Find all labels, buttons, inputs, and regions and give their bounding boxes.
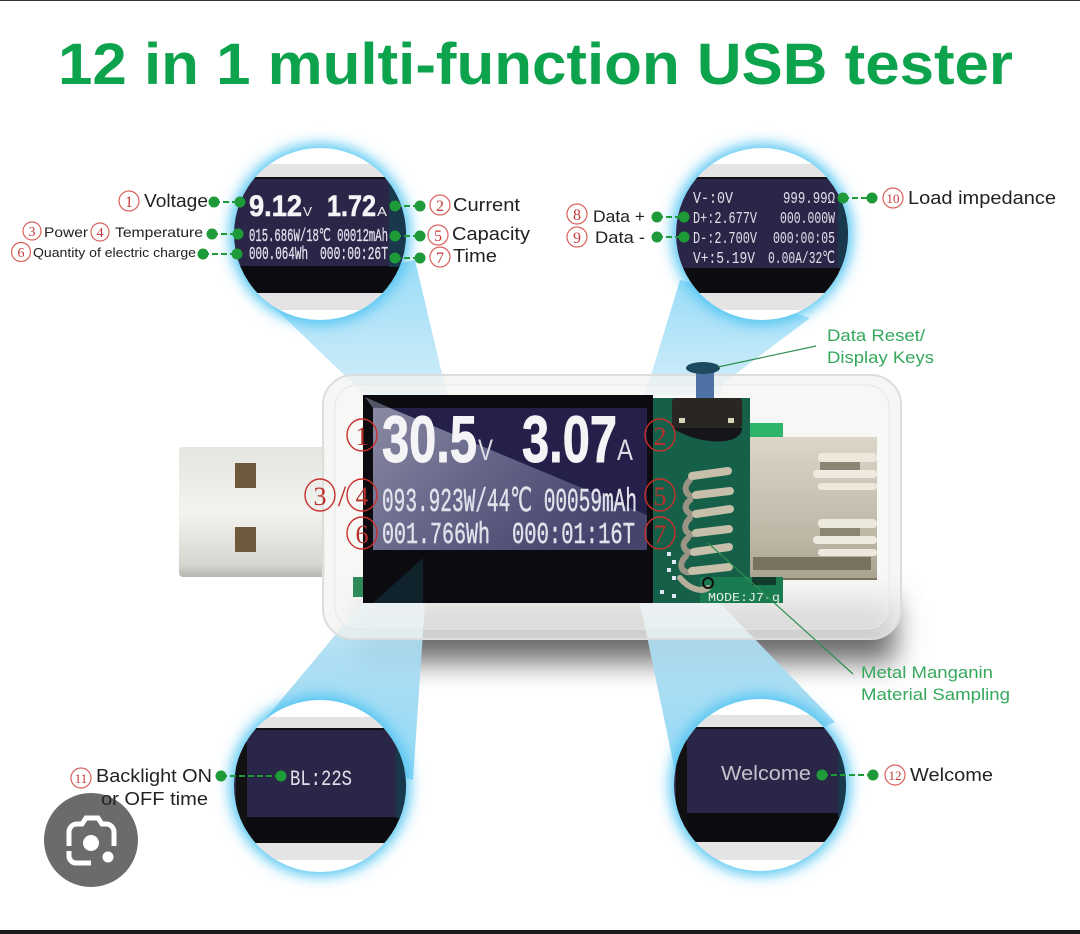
line to manganin xyxy=(708,543,853,674)
display module xyxy=(363,395,653,603)
magnifier: main readings: V xyxy=(303,204,312,219)
callout: data plus: Data + xyxy=(593,207,645,226)
red number markers: 6 xyxy=(356,520,368,549)
callout: time: Time xyxy=(453,246,497,266)
zoomed data readings: D-:2.700V xyxy=(693,230,758,249)
zoomed data readings: D+:2.677V xyxy=(693,210,758,229)
callout: load impedance: Load impedance xyxy=(908,188,1056,208)
callout: backlight xyxy=(71,766,286,809)
magnifier: welcome xyxy=(670,695,850,875)
callout: capacity: Capacity xyxy=(452,224,530,244)
callout: voltage: Voltage xyxy=(144,191,208,211)
red number markers: 7 xyxy=(654,520,666,549)
zoomed data readings: 0.00A/32℃ xyxy=(768,250,835,269)
callout: welcome: Welcome xyxy=(910,765,993,785)
current unit: A xyxy=(617,434,633,467)
zoomed voltage: 9.12 xyxy=(249,190,302,223)
time reading: 000:01:16T xyxy=(512,518,635,553)
green tab xyxy=(748,423,783,437)
device shadow xyxy=(360,600,895,662)
icon: lens search button xyxy=(44,793,138,887)
callout: metal manganin: Material Sampling xyxy=(861,685,1010,704)
magnifier: data lines xyxy=(672,144,852,324)
backlight reading: BL:22S xyxy=(290,767,352,792)
red number markers: 5 xyxy=(654,482,666,511)
callout: metal manganin: Metal Manganin xyxy=(861,663,993,682)
zoomed data readings: V+:5.19V xyxy=(693,250,756,269)
zoomed energy and time line: 000.064Wh xyxy=(249,245,308,265)
zoomed data readings: 000:00:05 xyxy=(773,230,835,249)
zoomed data readings: V-:0V xyxy=(693,190,734,209)
welcome screen text: Welcome xyxy=(721,763,811,785)
energy reading: 001.766Wh xyxy=(382,518,490,553)
magnifier beams xyxy=(256,260,835,795)
USB plug xyxy=(179,447,325,577)
callout: power and temperature: 4 xyxy=(96,226,104,241)
callout: quantity of electric charge: Quantity of electric charge xyxy=(33,246,196,260)
callout: quantity of electric charge xyxy=(12,242,242,262)
callout: data reset keys: Data Reset/ xyxy=(827,326,925,345)
callout: backlight: Backlight ON xyxy=(96,766,212,786)
zoomed current: 1.72 xyxy=(327,190,376,223)
callout: welcome: 12 xyxy=(888,768,902,783)
callout: data plus: 8 xyxy=(573,207,581,224)
zoomed data readings xyxy=(693,190,836,269)
callout: voltage: 1 xyxy=(125,194,133,211)
callout: power and temperature: 3 xyxy=(28,225,36,240)
red number markers xyxy=(305,419,675,549)
zoomed data readings: 999.99Ω xyxy=(783,190,835,209)
callout: data reset keys xyxy=(718,326,934,367)
main reading: voltage: 30.5 xyxy=(382,402,477,476)
magnifier: main readings xyxy=(230,144,410,324)
board marking: MODE:J7-q xyxy=(708,591,780,605)
callout: voltage xyxy=(119,191,246,211)
USB female port xyxy=(750,437,877,580)
callout: backlight: or OFF time xyxy=(101,789,208,809)
red number markers: 1 xyxy=(356,422,368,451)
callout: power and temperature xyxy=(23,222,244,241)
red number markers: 4 xyxy=(356,482,368,511)
power temperature capacity line: 093.923W/44℃ 00059mAh xyxy=(382,484,637,521)
callout: data minus: Data - xyxy=(595,228,645,247)
callout: capacity xyxy=(390,224,530,245)
USB tester device xyxy=(179,362,901,674)
zoomed power line: 015.686W/18℃ 00012mAh xyxy=(249,227,388,247)
callout: load impedance xyxy=(838,188,1056,208)
red number markers: 3 xyxy=(314,482,326,511)
red number markers: 2 xyxy=(654,422,666,451)
callout: current: Current xyxy=(453,195,520,215)
magnifier: main readings: 000:00:26T xyxy=(320,245,388,265)
red number markers: / xyxy=(338,480,347,513)
callout: current xyxy=(390,195,520,215)
callout: time: 7 xyxy=(436,250,444,267)
callout: quantity of electric charge: 6 xyxy=(18,246,24,261)
circuit board xyxy=(353,398,783,603)
voltage unit: V xyxy=(478,434,493,467)
callout: data minus: 9 xyxy=(573,230,581,247)
callout: welcome xyxy=(816,765,993,785)
callout: power and temperature: Power xyxy=(44,224,88,240)
callout: load impedance: 10 xyxy=(886,191,900,206)
callout: data reset keys: Display Keys xyxy=(827,348,934,367)
magnifier: main readings: A xyxy=(377,204,387,219)
transparent case xyxy=(323,375,901,639)
callout: data minus xyxy=(567,227,690,247)
main reading: current: 3.07 xyxy=(522,402,617,476)
zoomed data readings: 000.000W xyxy=(780,210,836,229)
callout: metal manganin xyxy=(861,663,1010,704)
magnifier: backlight xyxy=(230,696,410,876)
callout: current: 2 xyxy=(436,198,444,215)
reset button xyxy=(672,362,742,442)
callout: time xyxy=(390,246,497,267)
callout: power and temperature: Temperature xyxy=(115,224,203,240)
manganin sampling coil xyxy=(680,471,730,590)
callout: capacity: 5 xyxy=(434,228,442,245)
callout: data plus xyxy=(567,204,690,226)
callout: backlight: 11 xyxy=(75,771,87,786)
title: 12 in 1 multi-function USB tester xyxy=(58,32,1013,97)
